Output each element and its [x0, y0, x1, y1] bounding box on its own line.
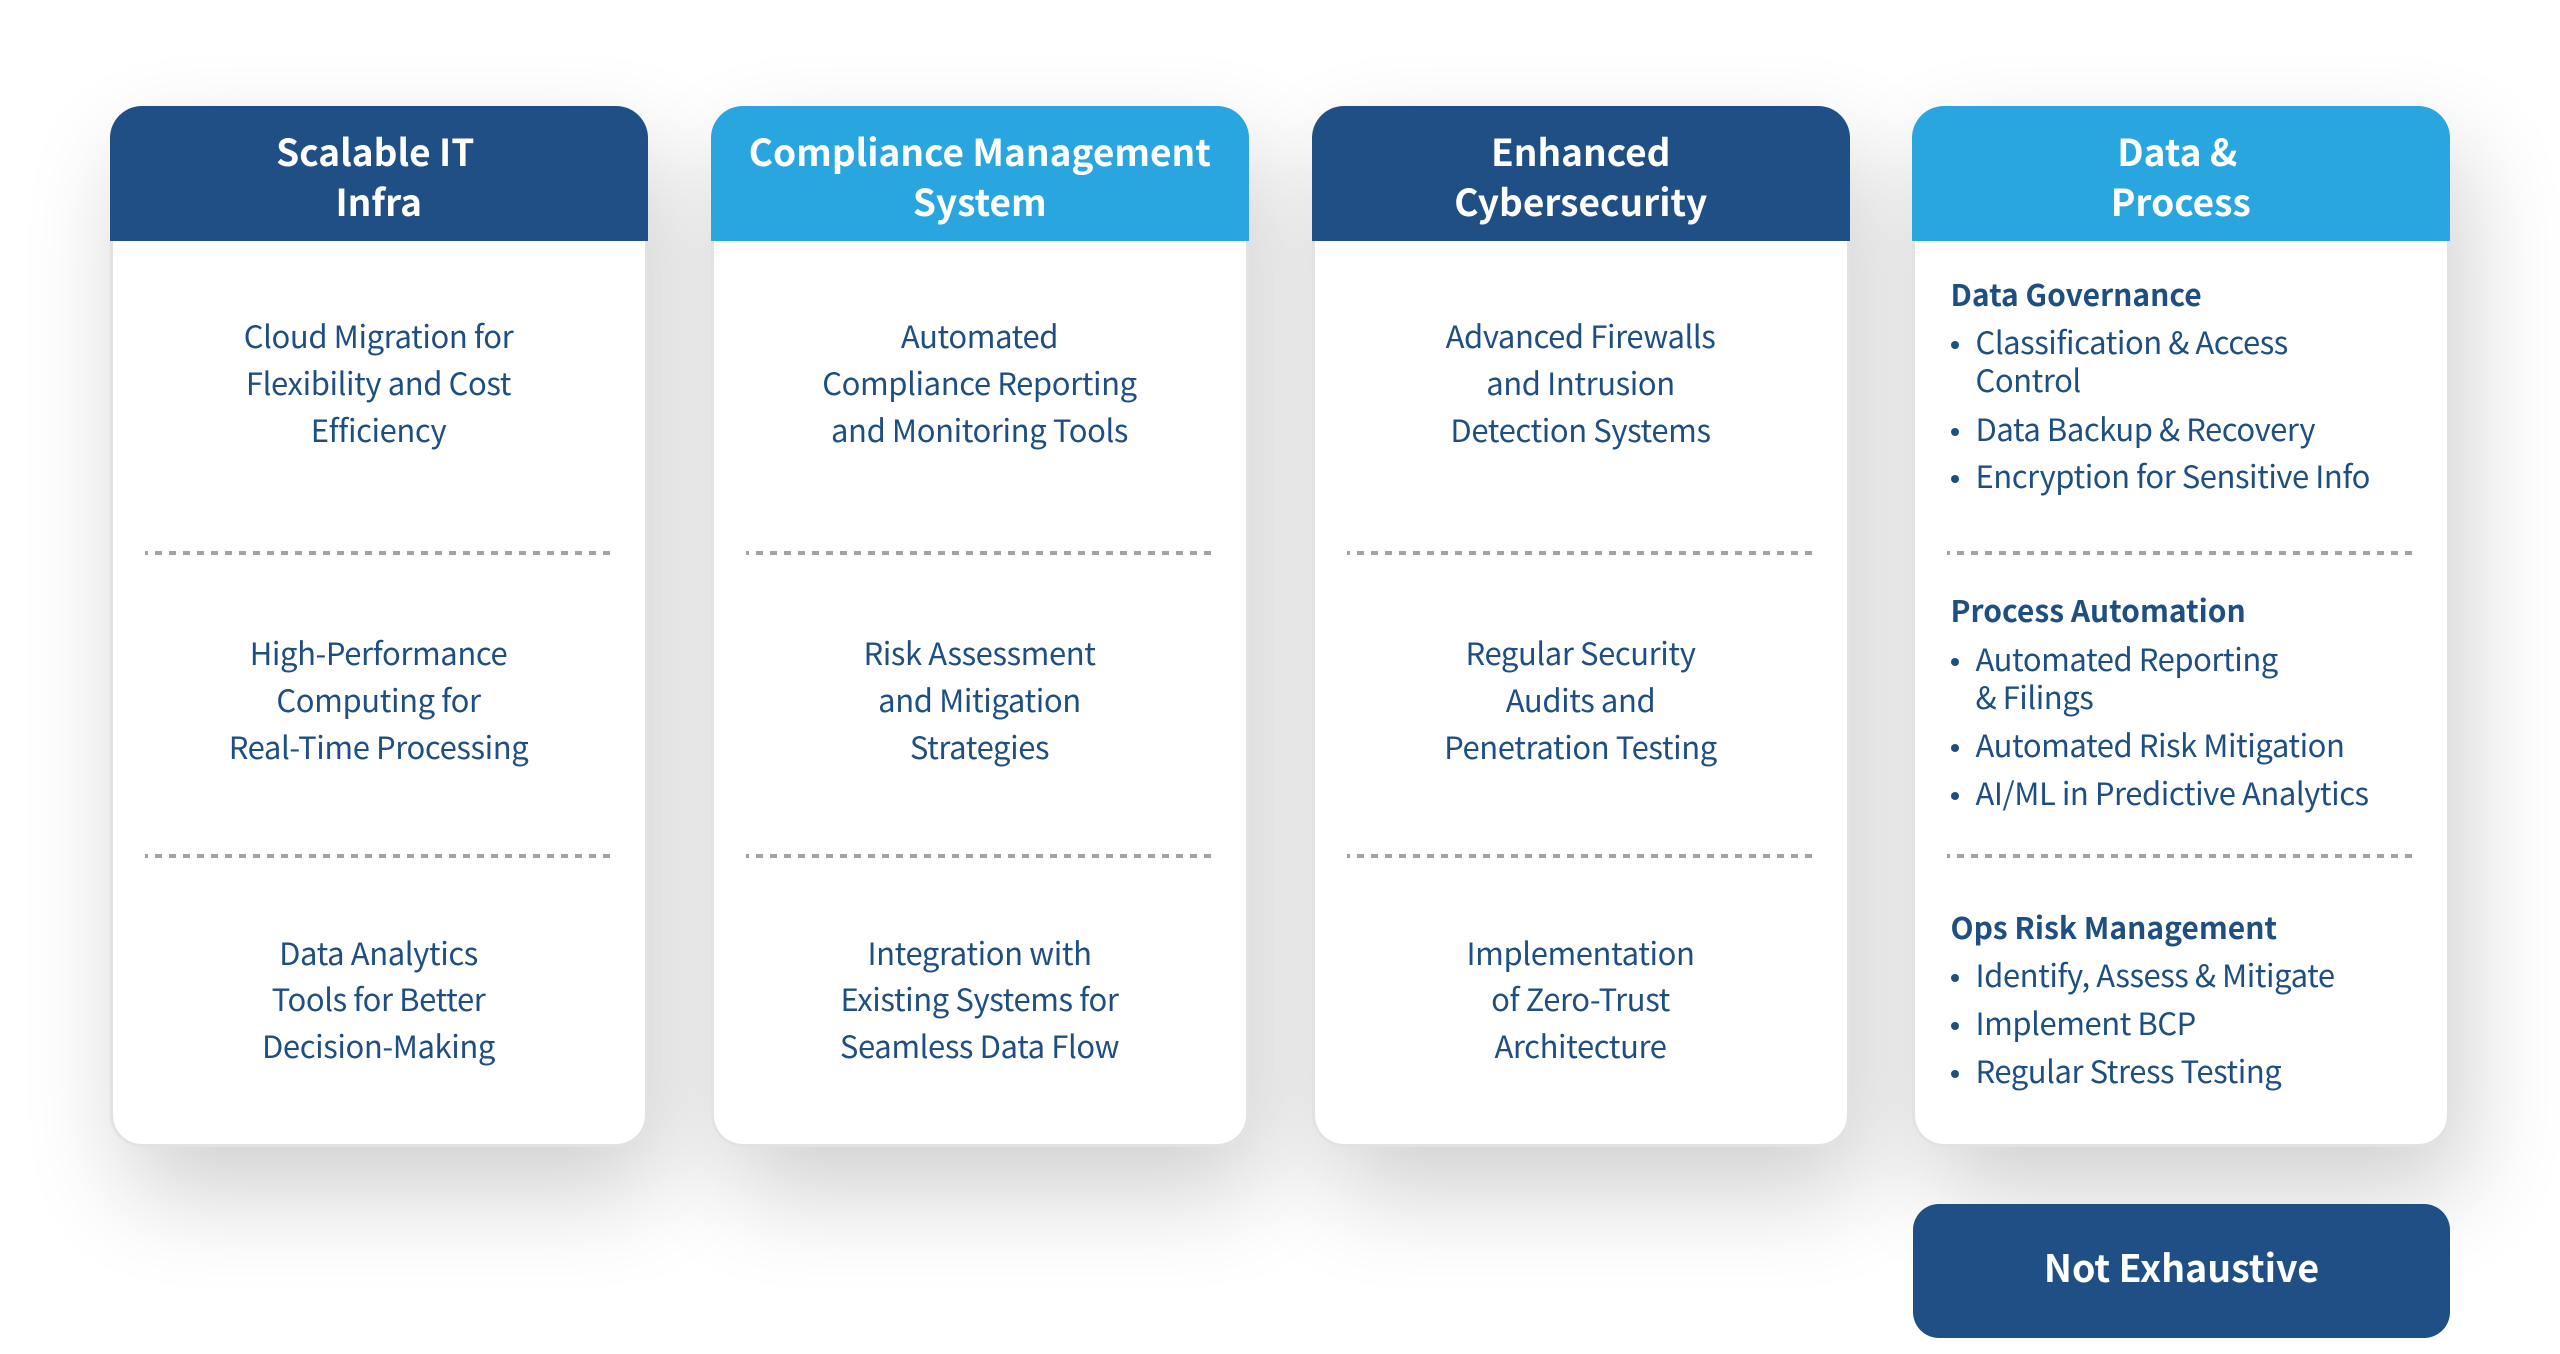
- text block: automated compliance reporting: and Monitoring Tools: [831, 406, 1128, 451]
- panel: Compliance Management System: [711, 106, 1248, 1147]
- text block: integration: Seamless Data Flow: [840, 1022, 1119, 1067]
- text block: data governance: Data Governance: [1950, 271, 2202, 315]
- text block: cloud migration: Efficiency: [311, 406, 446, 451]
- text block: ops risk management: Ops Risk Management: [1950, 904, 2277, 948]
- text block: data analytics: [262, 928, 495, 1067]
- text block: risk assessment: Risk Assessment: [863, 629, 1096, 674]
- text block: cloud migration: Flexibility and Cost: [246, 359, 511, 404]
- text block: process automation: [1950, 587, 2369, 814]
- heading: Scalable IT Infra: Infra: [335, 173, 422, 227]
- text block: advanced firewalls: [1446, 312, 1715, 451]
- heading: Data & Process: Data &: [2117, 123, 2237, 177]
- text block: automated compliance reporting: [822, 312, 1137, 451]
- text block: advanced firewalls: Advanced Firewalls: [1446, 312, 1715, 357]
- text block: ops risk management: Implement BCP: [1976, 999, 2196, 1044]
- text block: data analytics: Decision-Making: [262, 1022, 495, 1067]
- text block: ops risk management: Identify, Assess & Mitigate: [1976, 951, 2335, 996]
- text block: ops risk management: Regular Stress Testing: [1976, 1047, 2281, 1092]
- text block: security audits: Audits and: [1506, 676, 1655, 721]
- text block: security audits: Regular Security: [1466, 629, 1695, 674]
- text block: data governance: [1950, 271, 2370, 497]
- text block: zero-trust: of Zero-Trust: [1491, 975, 1670, 1020]
- text block: cloud migration: Cloud Migration for: [244, 312, 513, 357]
- heading: Data & Process: Process: [2111, 173, 2251, 227]
- text block: automated compliance reporting: Automated: [901, 312, 1058, 357]
- text block: process automation: Automated Reporting: [1976, 635, 2278, 680]
- text block: data governance: Encryption for Sensitive Info: [1976, 452, 2370, 497]
- text block: advanced firewalls: Detection Systems: [1450, 406, 1711, 451]
- text block: high-performance computing: Computing for: [276, 676, 481, 721]
- text block: data analytics: Tools for Better: [272, 975, 485, 1020]
- heading: Enhanced Cybersecurity: Cybersecurity: [1454, 173, 1707, 227]
- text block: process automation: & Filings: [1976, 673, 2093, 718]
- text block: zero-trust: Architecture: [1494, 1022, 1667, 1067]
- text block: data governance: Data Backup & Recovery: [1976, 405, 2315, 450]
- heading: Enhanced Cybersecurity: Enhanced: [1491, 123, 1670, 177]
- heading: Compliance Management System: System: [913, 173, 1047, 227]
- text block: integration: [840, 928, 1119, 1067]
- text block: ops risk management: [1950, 904, 2335, 1092]
- text block: risk assessment: and Mitigation: [878, 676, 1081, 721]
- text block: high-performance computing: [229, 629, 528, 768]
- panel: Enhanced Cybersecurity: [1312, 106, 1850, 1147]
- heading: Enhanced Cybersecurity: [1312, 106, 1850, 241]
- text block: process automation: Automated Risk Mitigation: [1976, 721, 2344, 766]
- text block: high-performance computing: High-Performance: [250, 629, 507, 674]
- callout: Not Exhaustive: Not Exhaustive: [2044, 1238, 2319, 1293]
- callout: Not Exhaustive: [1913, 1204, 2450, 1338]
- text block: integration: Integration with: [867, 928, 1092, 974]
- text block: risk assessment: [863, 629, 1096, 768]
- text block: security audits: Penetration Testing: [1444, 723, 1717, 768]
- text block: data governance: Control: [1976, 356, 2081, 401]
- text block: process automation: Process Automation: [1950, 587, 2246, 631]
- text block: security audits: [1444, 629, 1717, 768]
- text block: automated compliance reporting: Compliance Reporting: [822, 359, 1137, 404]
- panel: Data & Process: [1912, 106, 2450, 1147]
- heading: Compliance Management System: Compliance Management: [749, 123, 1211, 177]
- text block: zero-trust: [1466, 928, 1694, 1067]
- text block: advanced firewalls: and Intrusion: [1486, 359, 1675, 404]
- heading: Scalable IT Infra: [110, 106, 648, 241]
- heading: Scalable IT Infra: Scalable IT: [276, 123, 474, 177]
- text block: risk assessment: Strategies: [910, 723, 1049, 768]
- text block: process automation: AI/ML in Predictive Analytics: [1976, 769, 2369, 814]
- text block: data governance: Classification & Access: [1976, 318, 2288, 363]
- text block: integration: Existing Systems for: [840, 975, 1119, 1020]
- heading: Compliance Management System: [711, 106, 1248, 241]
- text block: data analytics: Data Analytics: [279, 928, 478, 974]
- text block: high-performance computing: Real-Time Processing: [229, 723, 528, 768]
- text block: cloud migration: [244, 312, 514, 451]
- heading: Data & Process: [1912, 106, 2450, 241]
- panel: Scalable IT Infra: [110, 106, 648, 1147]
- text block: zero-trust: Implementation: [1466, 928, 1694, 974]
